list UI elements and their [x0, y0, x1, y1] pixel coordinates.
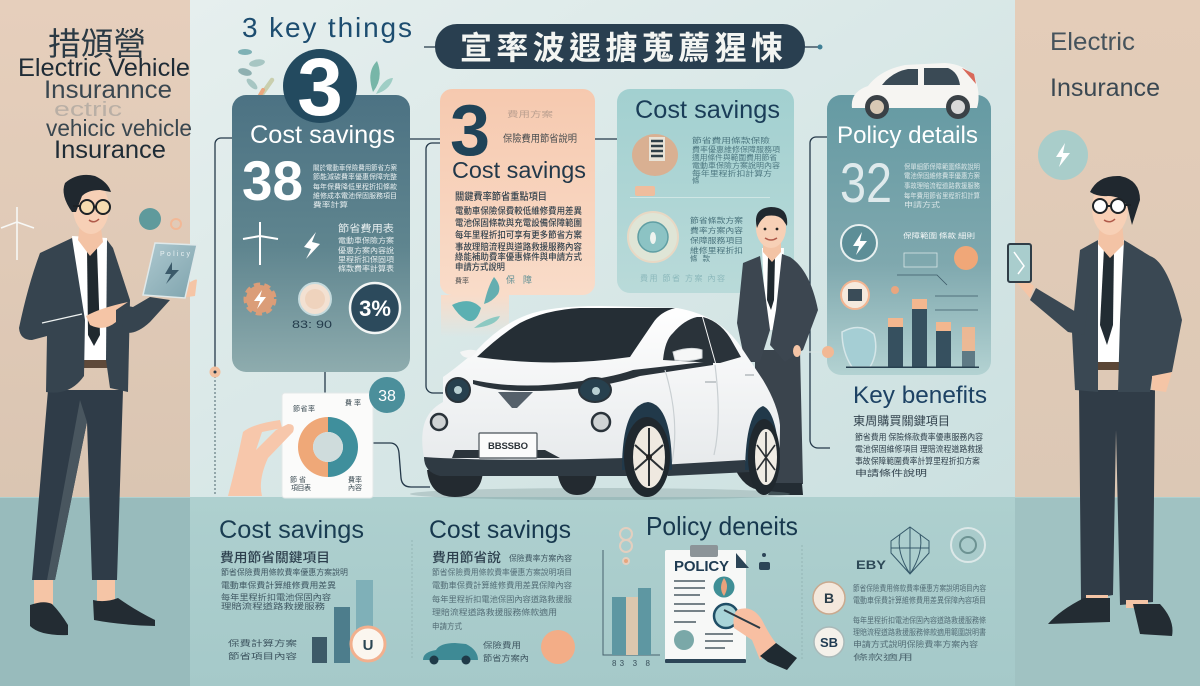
car mirror [673, 348, 702, 361]
panel 3 top text: 電動車保險方案說明內容 [692, 160, 781, 171]
left person trouser highlight [47, 400, 87, 580]
right person pocket hand [1152, 372, 1172, 392]
car belt line [473, 361, 713, 391]
car nose [498, 392, 533, 408]
small text right of bolt: 優惠方案內容說 [338, 245, 395, 256]
icon: wind turbine [243, 222, 278, 265]
section 4 body: 條款適用 [853, 652, 913, 663]
section 1 body: 理賠流程道路救援服務 [221, 601, 325, 612]
divider [630, 197, 770, 198]
icon: 3% ring [350, 283, 400, 333]
left heading block: vehicic vehicle [46, 115, 192, 141]
panel 2 footer row: 保障 [506, 273, 532, 286]
left person sleeve highlight [42, 314, 82, 323]
leaves under panel 2 [452, 277, 500, 328]
right person tie [1100, 248, 1114, 345]
background: left beige panel [0, 0, 190, 498]
panel 4 body text [904, 162, 980, 210]
left heading block: 措頒營 [48, 19, 146, 65]
section 1 subheading: 費用節省關鍵項目 [220, 547, 330, 566]
panel 2 body text: 申請方式說明 [455, 260, 505, 273]
bubble number: 38 [378, 388, 396, 405]
panel 3 lower text: 費率方案內容 [690, 225, 744, 236]
panel 4 body text: 每年費用節省里程折扣計算 [904, 191, 980, 201]
panel 4 body text: 電池保固維修費率優惠方案 [904, 171, 980, 181]
car front wheel [624, 417, 670, 497]
key benefits heading: Key benefits [853, 382, 987, 409]
bubble number [369, 377, 405, 413]
section 4 badge icon [951, 528, 985, 562]
icon: tan coin [299, 283, 331, 315]
left person shirt [72, 236, 108, 362]
connector lines [215, 137, 830, 495]
panel 2 body text: 事故理賠流程與道路救援服務內容 [455, 240, 582, 253]
donut legend [290, 398, 362, 493]
right person head [1090, 176, 1140, 258]
car shadow [410, 488, 790, 500]
section 1 heading: Cost savings [219, 516, 364, 544]
panel 2: cost savings peach [440, 89, 595, 337]
middle person [737, 207, 818, 495]
small teal bubble on left [139, 208, 181, 230]
left person jacket left side [19, 238, 85, 393]
tablet: Policy [160, 251, 190, 258]
small text right of bolt: 電動車保險方案 [338, 235, 395, 246]
right bolt bubble [1038, 130, 1088, 180]
key benefits text: 事故保障範圍費率計算里程折扣方案 [855, 455, 980, 467]
panel 2 small header: 費用方案 [507, 109, 553, 120]
section 2 peach circle [541, 630, 575, 664]
donut legend: 項目表 [291, 483, 311, 493]
hand holding donut card [228, 420, 294, 496]
left person neck and head [64, 175, 111, 256]
small text right of bolt: 里程折扣保固項 [338, 254, 395, 265]
car left front tyre [427, 470, 483, 497]
section 2 caption: 保險費用 [483, 640, 521, 651]
right heading block [1050, 28, 1160, 102]
key benefits text: 電池保固維修項目 理賠流程道路救援 [855, 443, 983, 455]
phone [1008, 244, 1031, 282]
middle person head [756, 207, 787, 262]
left person pointing hand [86, 302, 128, 328]
small side icon [759, 553, 770, 570]
car side mirror near hood [460, 350, 478, 358]
panel 2 body text: 電池保固條款與充電設備保障範圍 [455, 216, 582, 229]
panel 1 body text: 維修成本電池保固服務項目 [313, 191, 397, 201]
section 2 subheading tail: 保險費率方案內容 [509, 553, 572, 564]
left person shoes [30, 598, 155, 635]
right person belt [1092, 362, 1128, 370]
donut legend: 內容 [348, 483, 362, 493]
bottom section 4 [813, 527, 986, 663]
panel 1 body text: 費率計算 [313, 200, 348, 210]
icon: peach circle [954, 246, 978, 270]
panel 3 top text: 節省費用條款保險 [692, 135, 771, 146]
caption below coin: 83: 90 [292, 319, 332, 331]
connector dot on left line [210, 366, 220, 378]
car body [422, 306, 780, 472]
decorative wind turbine on left [1, 207, 34, 260]
section 4 body: 每年里程折扣電池保固內容道路救援服務條 [853, 615, 986, 626]
panel 3 heading: Cost savings [635, 96, 780, 124]
section 1 body: 電動車保費計算維修費用差異 [221, 580, 336, 591]
left person jacket right side [106, 240, 130, 392]
bottom section 2 [423, 516, 575, 664]
section 2 heading: Cost savings [429, 516, 571, 544]
left person forearm [122, 297, 170, 333]
key benefits text [853, 412, 983, 479]
leaves decoration right of 3 badge [370, 61, 393, 94]
icon: orange gear [246, 285, 274, 313]
icon: document badge [632, 134, 678, 176]
car windshield [477, 308, 675, 362]
donut card [282, 393, 373, 498]
left person ankles [34, 580, 115, 606]
panel 1: cost savings [232, 42, 410, 372]
section 1 bars [312, 580, 373, 663]
panel 3 lower text: 條款 [690, 253, 710, 264]
section 4 body: 節省保險費用條款費率優惠方案說明項目內容 [853, 583, 986, 594]
section 2 body: 每年里程折扣電池保固內容道路救援服 [432, 594, 572, 605]
car headlight inner [454, 386, 600, 395]
panel 2 small header [503, 109, 577, 145]
icon: bolt [304, 232, 320, 259]
middle person legs [755, 350, 803, 484]
section 4 body: 電動車保費計算維修費用差異保障內容項目 [853, 595, 986, 606]
left heading block: Insurannce [44, 76, 172, 104]
car lower band [424, 457, 640, 476]
donut chart [298, 417, 358, 477]
right person shirt [1097, 240, 1125, 362]
right person jacket left [1072, 240, 1098, 392]
panel 3 lower text: 保障服務項目 [690, 235, 743, 246]
middle person shoe [768, 483, 803, 495]
title pill: 宣率波遐搪蒐薦猩悚 [460, 23, 783, 69]
policy clipboard: POLICY [674, 558, 729, 575]
section 4 body: 申請方式說明保險費率方案內容 [853, 639, 978, 650]
panel 3: cost savings teal [617, 89, 794, 293]
left person tie [87, 248, 100, 346]
middle person hand [793, 345, 801, 357]
middle person shirt [762, 248, 784, 330]
car side windows [663, 317, 741, 363]
panel 3 top text: 費率優惠維修保障服務項 [692, 144, 781, 155]
panel 4 body text: 事故理賠流程道路救援服務 [904, 181, 980, 191]
panel 1 body text: 每年保費降低里程折扣條款 [313, 182, 397, 192]
middle person jacket [737, 254, 818, 362]
section 2 body: 電動車保費計算維修費用差異保障內容 [432, 580, 572, 591]
panel 2 heading: Cost savings [452, 157, 586, 183]
section 1 body: 保費計算方案 [228, 638, 297, 649]
tablet [143, 243, 197, 298]
bottom section 3 [603, 511, 798, 670]
panel 4 body text: 申請方式 [904, 200, 940, 210]
bar chart [846, 299, 979, 368]
small text right of bolt [338, 220, 395, 274]
left heading block: Electric Vehicle [18, 54, 190, 82]
section 3 chart [603, 550, 660, 668]
panel 1 number: 38 [242, 149, 303, 212]
car plate [479, 433, 537, 458]
car door handles [705, 375, 754, 382]
panel 4 heading: Policy details [837, 122, 978, 149]
car plate: BBSSBO [488, 441, 528, 452]
peach dot connector [808, 346, 834, 358]
section 1 body: 節省項目內容 [228, 651, 297, 662]
bottom section 1 [219, 516, 385, 663]
right person [1008, 176, 1182, 636]
section 4 ring icons: B [824, 590, 834, 606]
panel 2 footer row [455, 273, 532, 286]
icon: map ring [841, 281, 869, 309]
subtitle: 3 key things: 3 key things [242, 12, 412, 43]
panel 3 top text [692, 135, 781, 186]
right person raised arm [1030, 275, 1092, 335]
panel 2 body text: 關鍵費率節省重點項目 [455, 188, 547, 203]
panel 3 top text: 條 [692, 175, 700, 186]
right person hand [1008, 270, 1034, 298]
policy clipboard [665, 545, 749, 663]
background: right beige panel [1015, 0, 1200, 498]
background: bottom teal strip [0, 497, 1200, 686]
icon: teal ring [628, 212, 678, 262]
left heading block: ectric [54, 99, 122, 121]
car rear wheel arch [745, 406, 780, 470]
panel 4 number: 32 [840, 151, 892, 214]
right heading block: Electric [1050, 28, 1135, 56]
key benefits text: 節省費用 保險條款費率優惠服務內容 [855, 431, 983, 443]
panel 2 body text: 電動車保險保費較低維修費用差異 [455, 204, 582, 217]
left heading block [18, 19, 192, 164]
car inner front tyre [557, 470, 597, 495]
section 3 heading: Policy deneits [646, 511, 798, 541]
panel 2 small header: 保險費用節省說明 [503, 130, 577, 145]
middle person tie [767, 257, 775, 310]
section 1 body [221, 567, 348, 662]
donut legend: 費率 [345, 398, 361, 408]
section 1 icon: U [363, 637, 373, 654]
section 1 body: 節省保險費用條款費率優惠方案說明 [221, 567, 348, 578]
section 3 ring icons [620, 528, 632, 564]
panel 1 heading: Cost savings [250, 121, 395, 149]
car rear tyre back [733, 465, 765, 490]
small car top right [852, 63, 979, 119]
icon: bolt ring [841, 225, 877, 261]
section 2 body: 理賠流程道路救援服務條款適用 [432, 607, 557, 618]
panel 3 lower text [690, 215, 744, 264]
small text right of bolt: 條款費率計算表 [338, 263, 395, 274]
car grille [452, 450, 560, 458]
left person [19, 175, 170, 635]
key benefits text: 東周購買關鍵項目 [853, 412, 950, 429]
panel 4: policy details [827, 95, 991, 375]
panel 1 body text [313, 163, 397, 210]
small chart annotation lines [891, 275, 978, 310]
car fog lights [431, 413, 610, 431]
section 4 ring icons: SB [820, 635, 838, 650]
panel 3 top text: 適用條件與範圍費用節省 [692, 152, 778, 163]
donut legend: 費率 [348, 475, 362, 485]
badge: number 3: 3 [297, 42, 343, 133]
small peach tag [635, 186, 655, 196]
panel 2 body text: 每年里程折扣可享有更多節省方案 [455, 228, 582, 241]
section 2 teal car [423, 643, 478, 664]
right person shoes [1048, 598, 1172, 636]
right heading block: Insurance [1050, 74, 1160, 102]
donut legend: 節省率 [293, 404, 315, 414]
panel 2 body text [455, 188, 582, 273]
section 4 globe icon [891, 527, 929, 574]
car rear wheel [748, 419, 780, 495]
section 1 icon [351, 627, 385, 661]
section 2 caption: 節省方案內 [483, 653, 529, 664]
car headlights [446, 378, 611, 402]
section 4 ring icons [813, 582, 845, 657]
left heading block: Insurance [54, 136, 166, 164]
background: bottom right band [1015, 498, 1200, 686]
section 4 body: 理賠流程道路救援服務條款適用範圍說明書 [853, 627, 986, 638]
leaves decoration left of 3 badge [237, 49, 272, 97]
section dividers [412, 540, 802, 660]
panel 2 number: 3 [450, 91, 490, 171]
main white car [410, 306, 790, 500]
icon: shield [842, 327, 876, 367]
icon: 3% ring: 3% [359, 296, 391, 321]
badge: number 3 [283, 42, 357, 133]
panel 1 body text: 節能減碳費率優惠保障完整 [313, 172, 397, 182]
background: centre [190, 0, 1015, 500]
panel 2 body text: 綠能補助費率優惠條件與申請方式 [455, 250, 582, 263]
car side sill [660, 460, 750, 476]
panel 3 lower text: 節省條款方案 [690, 215, 744, 226]
section 4 body [853, 583, 986, 663]
section 2 body: 節省保險費用條款費率優惠方案說明項目 [432, 567, 572, 578]
left person legs [32, 390, 123, 580]
small outlined note [904, 253, 937, 267]
small caption row: 保障範圍 條款 細則 [903, 231, 975, 241]
panel 3 lower text: 維修里程折扣 [690, 245, 743, 256]
section 2 subheading: 費用節省說 [432, 547, 501, 566]
donut legend: 節省 [290, 475, 306, 485]
right person legs [1079, 390, 1155, 605]
panel 3 top text: 每年里程折扣計算方 [692, 168, 773, 179]
section 2 caption [483, 640, 529, 664]
panel 1 body text: 關於電動車保險費用節省方案 [313, 163, 397, 173]
car front wheel arch [622, 402, 672, 470]
car door lines [665, 365, 718, 462]
right person jacket right [1118, 240, 1182, 392]
hand with pen [724, 608, 797, 670]
panel 3 faint footer: 費用 節省 方案 內容 [640, 273, 725, 284]
section 2 body: 申請方式 [432, 621, 462, 632]
right person ankles [1086, 595, 1148, 608]
key benefits text: 申請條件說明 [855, 467, 927, 479]
background: bottom left band [0, 498, 190, 686]
small text right of bolt: 節省費用表 [338, 220, 394, 235]
section 1 body: 每年里程折扣電池保固內容 [221, 592, 331, 603]
panel 2 footer row: 費率 [455, 276, 469, 286]
section 4 label: EBY [856, 558, 886, 572]
panel 4 body text: 保單細節保障範圍條款說明 [904, 162, 980, 172]
section 2 body [432, 567, 572, 632]
section 3 chart: 83 3 8 [612, 659, 651, 668]
left person belt [83, 360, 109, 368]
